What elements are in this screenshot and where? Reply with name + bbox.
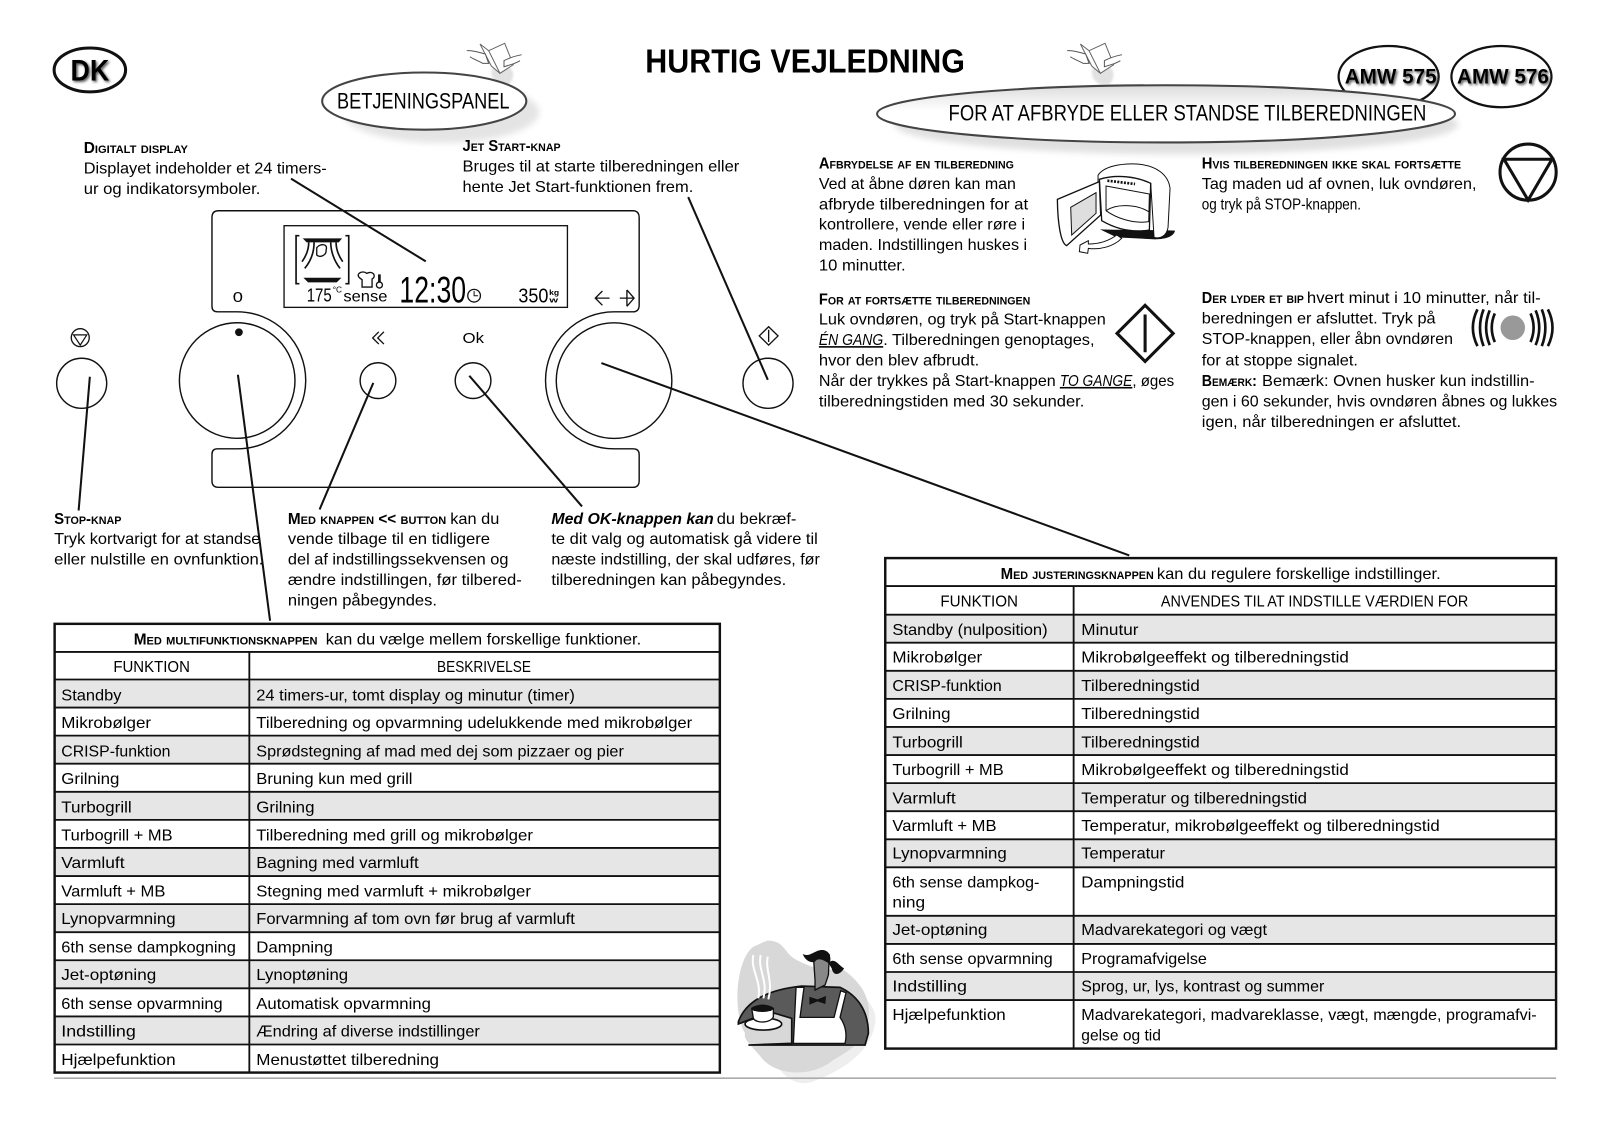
icon: beep signal [1473,309,1553,346]
column: funktion: Standby [61,687,122,704]
text: der lyder et bip: for at stoppe signalet. [1202,353,1358,370]
column: funktion: Varmluft + MB [61,883,165,900]
column: funktion: Varmluft [61,855,125,872]
column: funktion: Grilning [892,706,951,723]
heading: for at afbryde [877,85,1458,154]
text: der lyder et bip: Bemærk: Ovnen husker kun indstillin- [1262,373,1535,390]
column headers: BESKRIVELSE [437,659,531,676]
icon: stop symbol [1500,144,1556,200]
text: for at fortsaette: tilberedningstiden med 30 sekunder. [819,393,1084,410]
column: funktion: Varmluft + MB [892,818,997,835]
table heading: kan du regulere forskellige indstillinger. [1157,566,1441,583]
text: jet start-knap: hente Jet Start-funktionen frem. [463,179,693,196]
text: afbrydelse: 10 minutter. [819,258,906,275]
text: afbrydelse [819,155,1029,275]
column: funktion: Mikrobølger [892,650,982,667]
text: der lyder et bip: STOP-knappen, eller åbn ovndøren [1202,330,1453,348]
digital display: °C [333,285,342,294]
column: funktion [61,687,236,1069]
title: HURTIG VEJLEDNING [645,43,965,80]
digital display: kg [549,288,559,297]
column: anvendes til: Temperatur, mikrobølgeeffekt og tilberedningstid [1081,818,1440,835]
label: zero: 0 [233,290,243,306]
control panel diagram [57,211,793,487]
leader lines [79,179,1129,621]
text: med knappen: kan du [450,511,499,528]
text: med knappen: ændre indstillingen, før tilbered- [288,572,522,589]
column: funktion: Indstilling [892,978,967,995]
text: hvis tilberedningen ikke skal fortsaette: Hvis tilberedningen ikke skal fortsætte [1202,155,1461,172]
icon: oven with open door [1057,164,1175,253]
digital display: sense [343,289,388,306]
text: der lyder et bip: Bemærk: [1202,373,1257,390]
text: stop-knap: Tryk kortvarigt for at standse [54,531,261,548]
text: for at fortsaette: TO GANGE [1060,373,1133,390]
table heading [134,631,641,648]
text: stop-knap: Stop-knap [54,511,122,528]
badge: DK: DK [70,55,110,88]
multifunction dial [179,323,295,438]
text: med ok-knappen [551,511,820,589]
text: for at fortsaette: ÉN GANG [819,330,883,349]
text: med knappen: ningen påbegyndes. [288,591,437,609]
column: beskrivelse: Automatisk opvarmning [256,996,431,1013]
column headers: ANVENDES TIL AT INDSTILLE VÆRDIEN FOR [1161,593,1468,610]
text: der lyder et bip: hvert minut i 10 minutter, når til- [1307,289,1541,307]
column: anvendes til: Temperatur og tilberedningstid [1081,791,1307,808]
row shading [55,679,720,1044]
column: anvendes til: gelse og tid [1081,1027,1161,1044]
text: afbrydelse: afbryde tilberedningen for at [819,196,1029,213]
column: funktion: ning [892,895,925,912]
column: funktion [892,622,1053,1024]
text: med knappen: Med knappen << button [288,511,446,528]
column: beskrivelse: Bagning med varmluft [256,855,419,872]
digital display: 175 [307,286,332,306]
badge: AMW 575 [1339,46,1439,107]
text: med knappen: del af indstillingssekvensen og [288,552,508,569]
icon: book right [1067,43,1122,85]
ok button [455,331,491,399]
table: multifunktionsknappen [55,624,720,1073]
text: hvis tilberedningen ikke skal fortsaette: Tag maden ud af ovnen, luk ovndøren, [1202,176,1476,193]
text: digitalt display: Displayet indeholder et 24 timers- [84,161,327,178]
column: anvendes til: Tilberedningstid [1081,706,1200,723]
table: justeringsknappen [885,558,1556,1049]
text: stop-knap: eller nulstille en ovnfunktion. [54,552,263,569]
text: digitalt display: Digitalt display [84,140,189,157]
icon: arrows [595,290,634,306]
text: digitalt display: ur og indikatorsymboler. [84,181,260,198]
panel outline [212,211,639,487]
text: med knappen [288,511,522,609]
heading: for at afbryde: FOR AT AFBRYDE ELLER STANDSE TILBEREDNINGEN [949,100,1426,125]
text: for at fortsaette: Når der trykkes på Start-knappen [819,372,1056,390]
column: beskrivelse: Forvarmning af tom ovn før brug af varmluft [256,911,575,928]
text: der lyder et bip: gen i 60 sekunder, hvis ovndøren åbnes og lukkes [1202,392,1557,410]
column: beskrivelse: Sprødstegning af mad med dej som pizzaer og pier [256,744,624,761]
column: anvendes til: Madvarekategori, madvareklasse, vægt, mængde, programafvi- [1081,1007,1537,1024]
column: funktion: 6th sense opvarmning [61,996,223,1013]
text: der lyder et bip: beredningen er afsluttet. Tryk på [1202,310,1436,328]
heading: betjeningspanel: BETJENINGSPANEL [337,89,510,114]
column: funktion: Turbogrill [61,800,132,817]
column: funktion: Standby (nulposition) [892,622,1048,639]
text: jet start-knap [463,138,739,196]
badge: DK [54,48,126,92]
text: med ok-knappen: tilberedningen kan påbegyndes. [551,571,786,589]
text: for at fortsaette: Luk ovndøren, og tryk på Start-knappen [819,311,1106,329]
column: beskrivelse: Stegning med varmluft + mikrobølger [256,883,531,900]
column headers [940,593,1468,610]
start button [743,327,793,408]
text: for at fortsaette: hvor den blev afbrudt. [819,353,979,370]
column headers: FUNKTION [113,659,190,676]
text: jet start-knap: Bruges til at starte tilberedningen eller [463,159,739,176]
column: beskrivelse: Tilberedning og opvarmning udelukkende med mikrobølger [256,715,692,732]
badge: AMW 575: AMW 575 [1345,65,1437,89]
ok button: Ok [463,331,485,347]
text: afbrydelse: Ved at åbne døren kan man [819,175,1016,193]
text: med ok-knappen: næste indstilling, der skal udføres, før [551,552,820,569]
illustration: waiter with coffee [737,941,875,1083]
column: funktion: Jet-optøning [61,967,156,984]
column: beskrivelse: Ændring af diverse indstillinger [256,1023,480,1040]
text: digitalt display [84,140,327,198]
text: for at fortsaette: . Tilberedningen genoptages, [883,332,1095,349]
column: anvendes til: Mikrobølgeeffekt og tilberedningstid [1081,650,1349,667]
icon: book left [467,43,522,85]
column: beskrivelse: Bruning kun med grill [256,771,413,788]
text: der lyder et bip: igen, når tilberedningen er afsluttet. [1202,413,1461,431]
column: funktion: 6th sense dampkog- [892,874,1039,891]
column: anvendes til [1081,622,1537,1044]
column: beskrivelse: Grilning [256,800,314,817]
text: der lyder et bip: Der lyder et bip [1202,290,1304,307]
column: anvendes til: Mikrobølgeeffekt og tilberedningstid [1081,762,1349,779]
column: funktion: Jet-optøning [892,922,987,939]
text: for at fortsaette: For at fortsætte tilberedningen [819,291,1030,308]
column: funktion: CRISP-funktion [61,744,171,761]
text: for at fortsaette [819,291,1174,410]
column: funktion: Indstilling [61,1023,136,1040]
column: beskrivelse: 24 timers-ur, tomt display og minutur (timer) [256,687,575,704]
column: funktion: Turbogrill + MB [61,827,173,844]
column headers: FUNKTION [940,593,1018,610]
column: funktion: Grilning [61,771,119,788]
column: anvendes til: Temperatur [1081,846,1165,863]
badge: AMW 576 [1451,46,1551,107]
column: beskrivelse [256,687,692,1069]
row shading [885,615,1556,1000]
text: med ok-knappen: du bekræf- [717,511,796,528]
table heading: Med multifunktionsknappen [134,631,318,648]
column: funktion: 6th sense dampkogning [61,940,236,957]
text: afbrydelse: Afbrydelse af en tilberedning [819,155,1014,172]
column: anvendes til: Tilberedningstid [1081,678,1200,695]
column: funktion: Mikrobølger [61,715,151,732]
column: funktion: Varmluft [892,791,956,808]
adjust dial [556,323,672,438]
column: anvendes til: Minutur [1081,622,1138,639]
column: funktion: Lynopvarmning [892,846,1007,863]
text: hvis tilberedningen ikke skal fortsaette: og tryk på STOP-knappen. [1202,195,1361,213]
column: beskrivelse: Lynoptøning [256,967,348,984]
column: beskrivelse: Tilberedning med grill og mikrobølger [256,827,533,844]
digital display: w [548,295,559,304]
column: anvendes til: Sprog, ur, lys, kontrast og summer [1081,978,1324,995]
icon: start diamond [1117,305,1173,361]
text: jet start-knap: Jet Start-knap [463,138,561,155]
text: med knappen: vende tilbage til en tidligere [288,531,490,548]
text: afbrydelse: maden. Indstillingen huskes i [819,237,1027,254]
column: anvendes til: Programafvigelse [1081,951,1207,968]
text: med ok-knappen: te dit valg og automatisk gå videre til [551,530,818,548]
column: funktion: Lynopvarmning [61,911,176,928]
back button [360,332,396,399]
column: funktion: Hjælpefunktion [61,1052,176,1069]
column: funktion: 6th sense opvarmning [892,951,1053,968]
column: beskrivelse: Menustøttet tilberedning [256,1052,439,1069]
column: anvendes til: Dampningstid [1081,874,1184,891]
digital display: 12:30 [399,268,466,310]
column: funktion: Turbogrill + MB [892,762,1004,779]
digital display [284,226,567,310]
heading: betjeningspanel [322,72,539,143]
text: hvis tilberedningen ikke skal fortsaette [1202,155,1476,213]
text: for at fortsaette: , øges [1132,373,1174,390]
column: funktion: Turbogrill [892,734,963,751]
text: der lyder et bip [1202,289,1557,431]
text: afbrydelse: kontrollere, vende eller røre i [819,217,1025,234]
column: anvendes til: Tilberedningstid [1081,734,1200,751]
text: med ok-knappen: Med OK-knappen kan [551,511,714,528]
stop button [57,329,107,408]
column: beskrivelse: Dampning [256,940,333,957]
badge: AMW 576: AMW 576 [1457,65,1549,89]
bottom rule [54,1077,1556,1079]
table heading [1001,566,1441,583]
table heading: kan du vælge mellem forskellige funktioner. [326,631,641,648]
column headers [113,659,531,676]
table heading: Med justeringsknappen [1001,566,1154,583]
text: stop-knap [54,511,263,569]
column: funktion: Hjælpefunktion [892,1007,1006,1024]
digital display: 350 [518,285,548,307]
column: anvendes til: Madvarekategori og vægt [1081,922,1268,939]
column: funktion: CRISP-funktion [892,678,1002,695]
